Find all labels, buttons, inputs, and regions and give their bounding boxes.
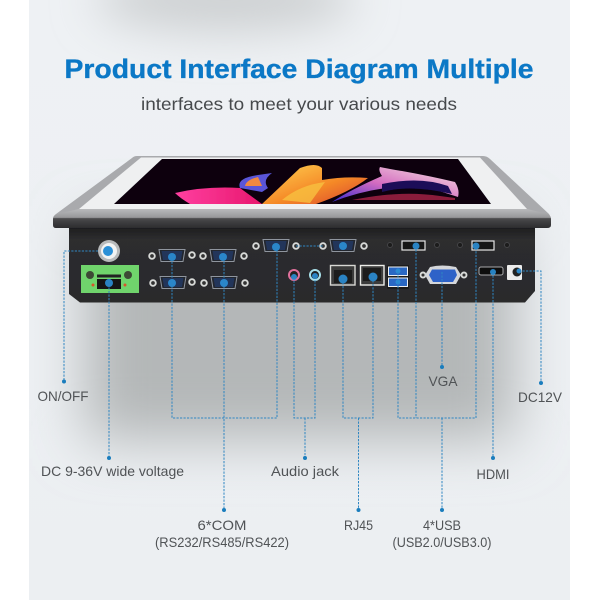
callout: Audio jack — [271, 277, 340, 479]
callout: HDMI — [476, 272, 510, 482]
port: COM 2 — [200, 250, 247, 262]
mounting holes — [388, 242, 510, 248]
metal rear housing — [69, 228, 535, 302]
port: COM 5 — [253, 240, 299, 252]
port: audio jack pink — [289, 270, 299, 280]
port: COM 6 — [320, 240, 367, 252]
callout: DC12V — [518, 271, 563, 405]
callout: DC12V: DC12V — [518, 389, 563, 405]
screen with abstract wallpaper — [114, 159, 491, 204]
port: COM 1 — [149, 250, 195, 262]
port: VGA — [420, 266, 466, 284]
port: HDMI — [479, 267, 503, 275]
callout: VGA: VGA — [428, 373, 458, 389]
callout: DC 9-36V — [41, 284, 184, 479]
subtitle: interfaces to meet your various needs — [141, 94, 457, 114]
callout: 4*USB: 4*USB — [423, 517, 461, 533]
port: RJ45 2 — [360, 266, 384, 285]
callout: RJ45 — [343, 277, 373, 533]
callout: ON/OFF: ON/OFF — [38, 388, 88, 404]
port: COM 4 — [201, 276, 248, 288]
port: stacked USB — [387, 265, 409, 289]
callout: 6*COM — [155, 246, 323, 550]
title: Product Interface Diagram Multiple — [64, 54, 534, 84]
port: top USB 1 — [402, 241, 425, 250]
callout: ON/OFF — [38, 251, 98, 404]
callout: HDMI: HDMI — [476, 466, 510, 482]
callout: DC 9-36V: DC 9-36V wide voltage — [41, 463, 184, 479]
callout: 4*USB: (USB2.0/USB3.0) — [392, 534, 492, 550]
callout: 6*COM: (RS232/RS485/RS422) — [155, 534, 289, 550]
callout: RJ45: RJ45 — [344, 517, 373, 533]
callout: VGA — [428, 272, 458, 389]
port: RJ45 1 — [330, 266, 355, 285]
port: DC12V jack — [507, 265, 522, 280]
port: audio jack blue — [310, 270, 320, 280]
product: panel PC rear view — [53, 156, 551, 302]
port: top USB 2 — [472, 241, 494, 250]
panel front frame — [53, 156, 551, 222]
port: green power terminal block — [81, 265, 139, 293]
port: power button — [98, 240, 120, 262]
callout: Audio jack: Audio jack — [271, 463, 340, 479]
port: COM 3 — [150, 276, 195, 288]
callout: 4*USB — [392, 246, 492, 550]
frame edge — [53, 209, 551, 228]
callout: 6*COM: 6*COM — [198, 517, 246, 533]
